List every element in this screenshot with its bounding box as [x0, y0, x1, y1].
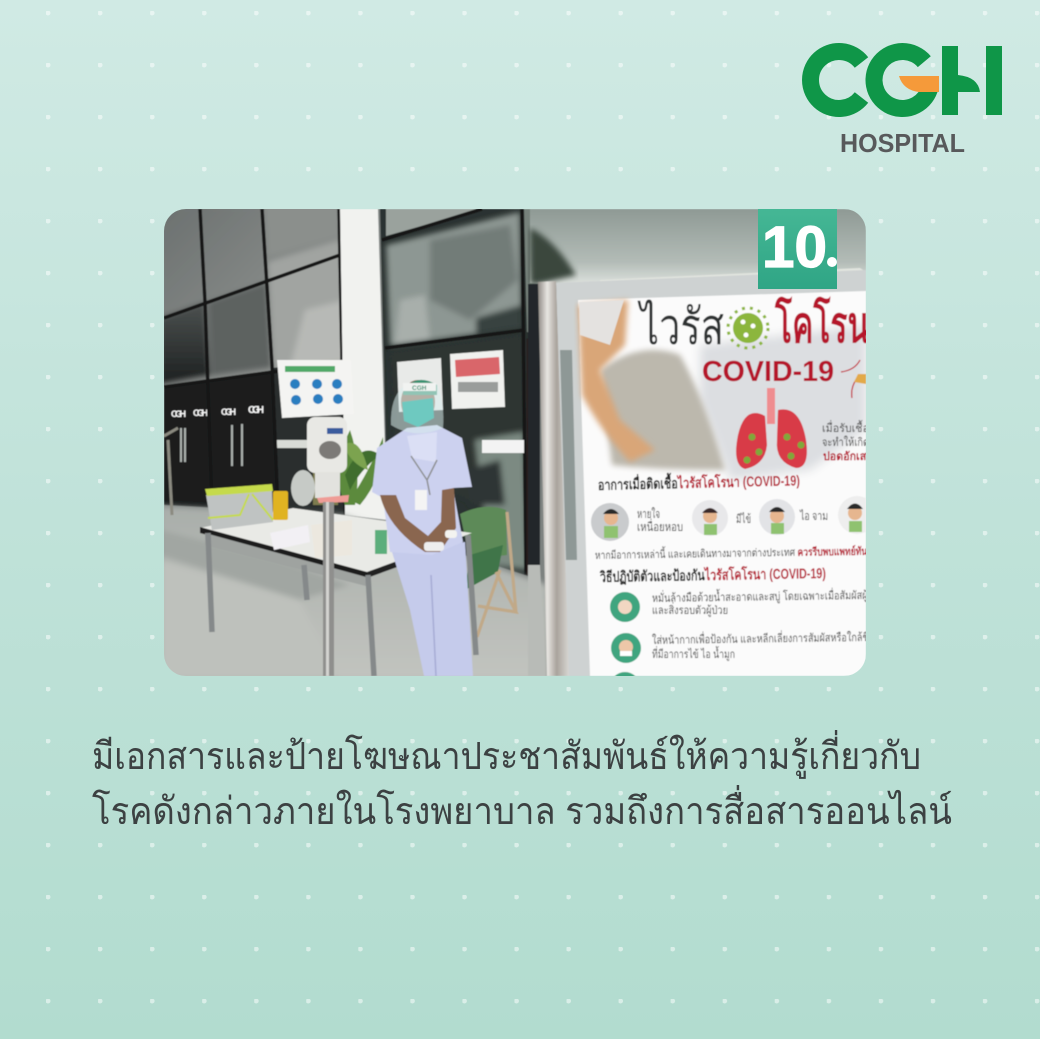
poster prevention heading: วิธีปฏิบัติตัวและป้องกันไวรัสโคโรนา (COVID-19)	[599, 564, 826, 586]
covid poster: โคโรนา	[774, 295, 887, 353]
left doors: CGH	[248, 405, 264, 416]
left doors: CGH	[193, 408, 208, 418]
items on table	[205, 484, 387, 558]
poster side text: ปอดอักเสบ	[823, 450, 873, 463]
small lectern	[164, 428, 178, 515]
poster symptom labels: ไอ จาม	[799, 509, 828, 523]
logo word HOSPITAL: HOSPITAL	[840, 128, 965, 158]
badge: number 10	[758, 209, 837, 289]
table	[200, 508, 476, 676]
poster shirt and hand	[600, 350, 725, 470]
caption line 2: โรคดังกล่าวภายในโรงพยาบาล รวมถึงการสื่อสารออนไลน์	[92, 785, 952, 833]
plant	[339, 430, 383, 505]
poster prevention text: และสิ่งรอบตัวผู้ป่วย	[652, 602, 728, 617]
poster lungs	[736, 388, 807, 469]
poster prevention icons	[609, 591, 642, 676]
chair	[460, 507, 516, 637]
poster map arrows	[841, 360, 860, 398]
poster symptom labels	[637, 507, 828, 534]
poster stand and frame	[528, 270, 866, 676]
poster symptoms heading: อาการเมื่อติดเชื้อไวรัสโคโรนา (COVID-19)	[598, 469, 800, 494]
nurse head and shield	[400, 380, 436, 412]
left doors: CGH	[171, 409, 186, 419]
covid poster: COVID-19	[702, 356, 834, 388]
poster prevention text	[652, 587, 884, 661]
left doors	[164, 360, 345, 515]
poster prevention text: หมั่นล้างมือด้วยน้ำสะอาดและสบู่ โดยเฉพาะเมื่อสัมผัสผู้ป่วย	[652, 587, 884, 605]
window frames	[164, 209, 345, 515]
poster symptom labels: มีไข้	[736, 512, 751, 526]
poster symptom icons	[591, 496, 876, 541]
nurse: CGH	[412, 385, 427, 392]
logo orange accent	[899, 76, 939, 92]
right glass	[380, 209, 540, 580]
nurse	[372, 380, 473, 676]
caption line 1: มีเอกสารและป้ายโฆษณาประชาสัมพันธ์ให้ความรู้เกี่ยวกับ	[92, 730, 921, 779]
poster side text: จะทำให้เกิด	[822, 436, 869, 449]
nurse arms	[380, 488, 456, 552]
poster prevention text: ใส่หน้ากากเพื่อป้องกัน และหลีกเลี่ยงการสัมผัสหรือใกล้ชิดผู้	[652, 629, 880, 647]
upper right reflection	[530, 209, 866, 285]
poster title: ไวรัส	[637, 299, 724, 355]
poster world map	[700, 325, 866, 480]
photo panel	[160, 205, 887, 702]
poster symptom labels: หายใจ	[637, 507, 660, 521]
poster advice line: หากมีอาการเหล่านี้ และเคยเดินทางมาจากต่างประเทศ ควรรีบพบแพทย์ทันที	[595, 543, 873, 562]
fan	[291, 470, 315, 506]
ground	[160, 506, 548, 680]
logo letter H	[942, 46, 1002, 115]
poster symptom labels: เหนื่อยหอบ	[637, 518, 683, 534]
left doors: CGH	[221, 407, 236, 417]
logo: CGH Hospital	[811, 43, 1002, 158]
white column	[340, 209, 387, 520]
nurse trousers	[392, 542, 473, 676]
poster side text	[822, 420, 866, 461]
covid poster	[574, 290, 866, 676]
logo letter G	[865, 43, 938, 117]
poster virus icon	[728, 308, 768, 348]
hand sanitiser stand	[277, 360, 354, 676]
logo letter C	[811, 52, 862, 109]
photo: hospital entrance	[160, 205, 887, 702]
left glass upper panes	[160, 205, 346, 390]
poster prevention text: ที่มีอาการไข้ ไอ น้ำมูก	[652, 646, 735, 661]
notices on glass	[397, 350, 524, 453]
caption text	[92, 730, 952, 833]
nurse tunic	[372, 425, 472, 555]
poster side text: เมื่อรับเชื้อ	[822, 420, 869, 435]
badge: number 10: 10	[762, 215, 827, 280]
